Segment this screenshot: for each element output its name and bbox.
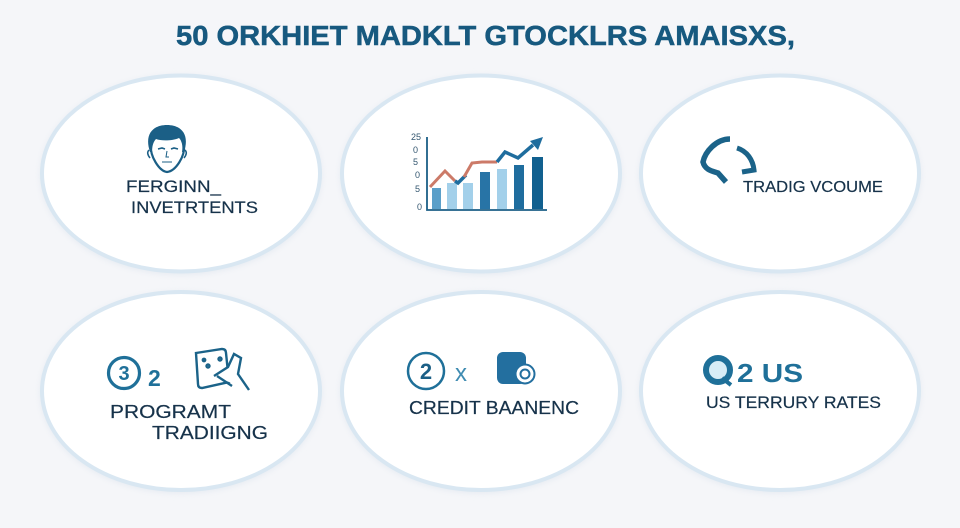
label: us treasury rates: US TERRURY RATES	[706, 393, 881, 412]
title: 50 ORKHIET MADKLT GTOCKLRS AMAISXS,	[176, 20, 795, 51]
panel: program trading	[40, 292, 322, 494]
icon: numbered circle	[108, 358, 161, 391]
panel: foreign investments	[40, 75, 322, 275]
label: credit balance: CREDIT BAANENC	[409, 398, 579, 418]
heading: 2 us: 2 US	[737, 358, 803, 388]
icon: numbered circle	[408, 353, 467, 389]
axis labels: 5	[415, 184, 420, 194]
label: program trading: PROGRAMT	[110, 401, 231, 422]
icon: numbered circle: 2	[148, 365, 161, 391]
panel: trading volume	[639, 75, 921, 275]
bar chart with trend arrow	[411, 132, 547, 212]
icon: numbered circle: 2	[420, 359, 432, 384]
label: foreign investments	[126, 177, 258, 217]
label: trading volume: TRADIG VCOUME	[743, 179, 883, 196]
panel: market chart	[340, 75, 622, 275]
axis labels	[411, 132, 422, 212]
label: program trading	[110, 401, 268, 443]
icon: numbered circle: x	[455, 360, 467, 387]
panel: us treasury rates	[639, 292, 921, 494]
icon: face	[148, 125, 186, 172]
axis labels: 0	[413, 145, 418, 155]
axis labels: 0	[415, 170, 420, 180]
icon: loop arrows	[703, 139, 754, 182]
icon: q badge	[706, 358, 731, 385]
icon: numbered circle: 3	[118, 363, 130, 385]
label: foreign investments: FERGINN_	[126, 177, 222, 196]
icon: hand on document	[196, 349, 249, 390]
panel: credit balance	[340, 292, 622, 494]
axis labels: 0	[417, 202, 422, 212]
label: foreign investments: INVETRTENTS	[131, 198, 258, 217]
icon: wallet with coin	[497, 352, 534, 384]
label: program trading: TRADIIGNG	[152, 423, 268, 443]
axis labels: 25	[411, 132, 421, 142]
axis labels: 5	[413, 157, 418, 167]
